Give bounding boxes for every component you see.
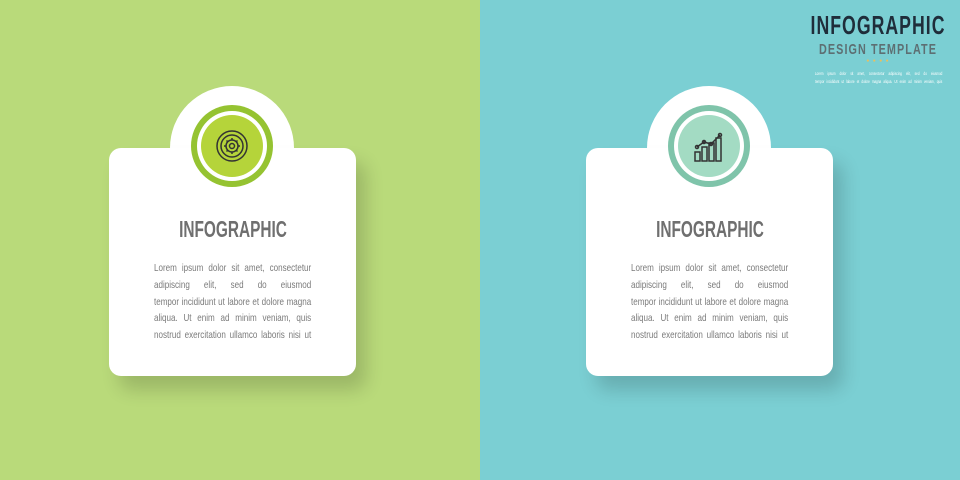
header small text: tempor incididunt ut labore et dolore magna aliqua. Ut enim ad minim veniam, quis (815, 79, 942, 84)
halo (170, 86, 294, 210)
heading: INFOGRAPHIC (179, 216, 287, 242)
text block: aliqua. Ut enim ad minim veniam, quis (154, 313, 311, 324)
halo (647, 86, 771, 210)
header small text: Lorem ipsum dolor sit amet, consectetur adipiscing elit, sed do eiusmod (815, 71, 942, 76)
panel: left card (109, 86, 372, 396)
text block (631, 263, 788, 341)
text block: nostrud exercitation ullamco laboris nisi ut (154, 330, 311, 341)
icon: growth chart (668, 105, 750, 187)
header title: INFOGRAPHIC (811, 10, 945, 40)
text block: tempor incididunt ut labore et dolore magna (631, 297, 788, 308)
heading: INFOGRAPHIC (656, 216, 764, 242)
panel: right card (586, 86, 850, 396)
header small text (815, 71, 942, 84)
header dots: ● ● ● ● (866, 58, 890, 64)
text block: Lorem ipsum dolor sit amet, consectetur (631, 263, 788, 274)
text block: adipiscing elit, sed do eiusmod (154, 280, 311, 291)
header subtitle: DESIGN TEMPLATE (819, 41, 937, 58)
text block (154, 263, 312, 341)
text block: tempor incididunt ut labore et dolore magna (154, 297, 311, 308)
text block: adipiscing elit, sed do eiusmod (631, 280, 788, 291)
text block: aliqua. Ut enim ad minim veniam, quis (631, 313, 788, 324)
icon: gear cycle (191, 105, 273, 187)
header: infographic design template (811, 10, 945, 84)
text block: Lorem ipsum dolor sit amet, consectetur (154, 263, 311, 274)
text block: nostrud exercitation ullamco laboris nisi ut (631, 330, 788, 341)
